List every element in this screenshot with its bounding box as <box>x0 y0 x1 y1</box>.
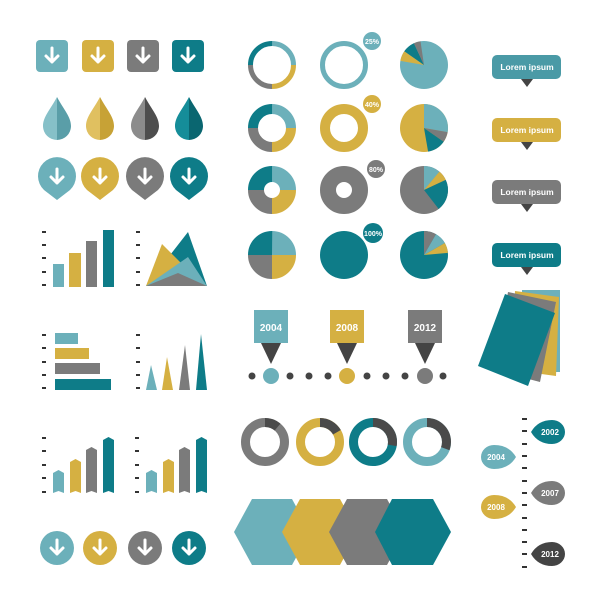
pie grid column 2: percentage rings: 100% <box>364 231 383 238</box>
vertical timeline: 2008 <box>487 503 505 512</box>
lorem ipsum callouts <box>492 55 561 275</box>
lorem ipsum callouts: Lorem ipsum <box>500 125 554 135</box>
bar chart 4: arrow-top bars <box>135 437 207 493</box>
row: square arrow icons <box>36 40 204 72</box>
pie grid column 2: percentage rings <box>320 32 385 279</box>
vertical timeline: 2012 <box>541 550 559 559</box>
pie grid column 2: percentage rings: 40% <box>365 102 380 109</box>
row: water drops <box>43 97 203 140</box>
pie grid column 2: percentage rings: 25% <box>365 39 380 46</box>
spike chart <box>136 334 207 390</box>
mountain chart <box>136 231 207 286</box>
horizontal timeline: 2004 <box>260 323 283 334</box>
donut row <box>246 422 446 462</box>
lorem ipsum callouts: Lorem ipsum <box>500 187 554 197</box>
vertical timeline <box>481 418 565 568</box>
lorem ipsum callouts: Lorem ipsum <box>500 250 554 260</box>
vertical timeline: 2002 <box>541 428 559 437</box>
hexagon row <box>234 499 451 565</box>
horizontal timeline: 2008 <box>336 323 359 334</box>
horizontal timeline: 2012 <box>414 323 437 334</box>
horizontal bar chart <box>42 333 111 390</box>
pie grid column 2: percentage rings: 80% <box>369 167 384 174</box>
horizontal timeline <box>248 310 446 384</box>
vertical timeline: 2007 <box>541 489 559 498</box>
bar chart 3: arrow-top bars <box>42 437 114 493</box>
pie grid column 1: quartered rings <box>250 44 294 267</box>
bar chart 1 <box>42 230 114 287</box>
lorem ipsum callouts: Lorem ipsum <box>500 62 554 72</box>
row: circle arrow icons <box>40 531 206 565</box>
pie grid column 3: pie charts <box>400 41 448 279</box>
vertical timeline: 2004 <box>487 453 505 462</box>
folded papers <box>478 290 560 386</box>
row: pin icons <box>38 157 208 200</box>
